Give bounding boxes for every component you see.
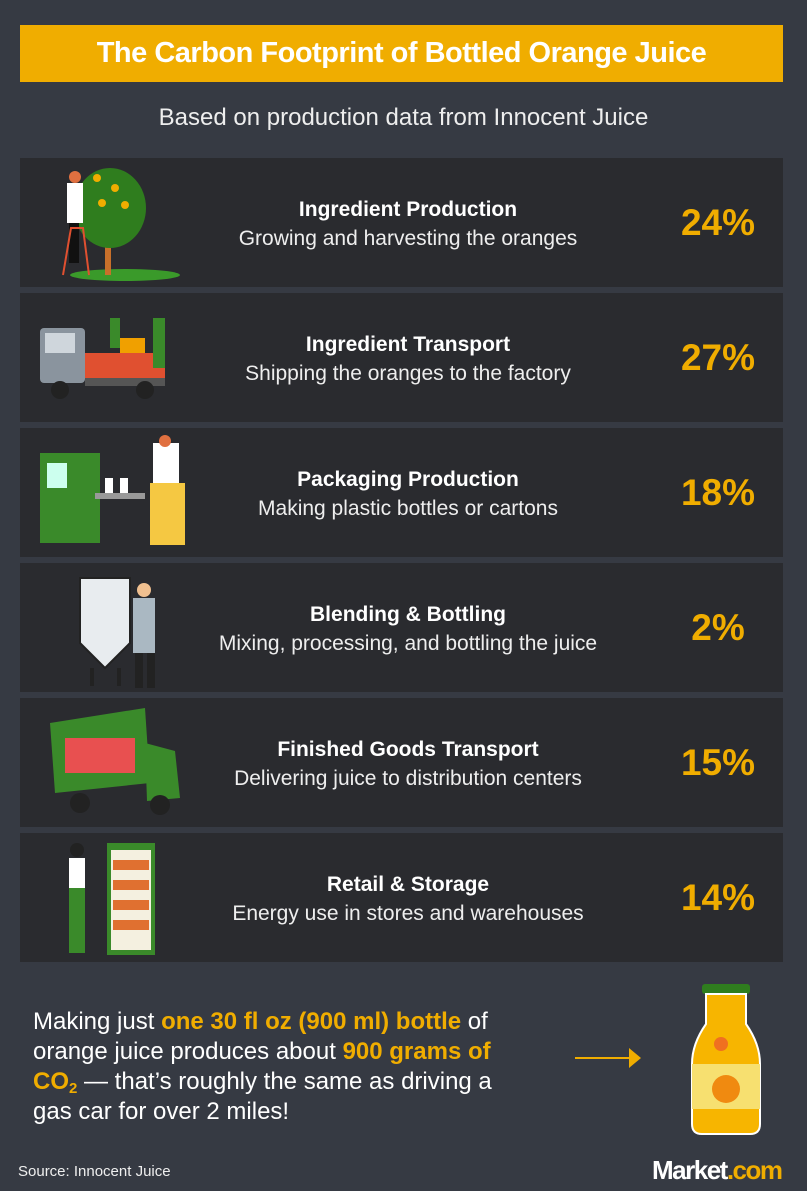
panel: retail & storage: Energy use in stores and warehouses: [232, 902, 584, 925]
panel: ingredient production: Growing and harvesting the oranges: [239, 227, 577, 250]
panel: ingredient transport: Ingredient Transport: [306, 333, 510, 356]
panel: packaging production: [20, 428, 783, 557]
panel: blending & bottling: 2%: [691, 607, 745, 648]
panel: blending & bottling: Blending & Bottling: [310, 603, 506, 626]
panel: blending & bottling: Mixing, processing, and bottling the juice: [219, 632, 597, 655]
source: Source: Innocent Juice: [18, 1163, 171, 1180]
callout text: [33, 1008, 492, 1125]
logo: Market.com: [652, 1155, 782, 1185]
panel: retail & storage: 14%: [681, 877, 755, 918]
panel: finished goods transport: 15%: [681, 742, 755, 783]
panel: retail & storage: [20, 833, 783, 962]
panel: packaging production: 18%: [681, 472, 755, 513]
icon: packaging machine: [40, 435, 185, 545]
panel: blending & bottling: [20, 563, 783, 692]
panel: ingredient transport: Shipping the oranges to the factory: [245, 362, 571, 385]
title: [20, 25, 783, 82]
icon: juice bottle: [691, 984, 761, 1135]
callout text: Making just one 30 fl oz (900 ml) bottle of: [33, 1008, 488, 1035]
icon: orange tree: [62, 168, 180, 281]
panel: ingredient production: Ingredient Production: [299, 198, 517, 221]
icon: shopper and shelf: [69, 843, 155, 955]
panel: ingredient production: 24%: [681, 202, 755, 243]
callout text: gas car for over 2 miles!: [33, 1098, 289, 1125]
title: The Carbon Footprint of Bottled Orange Juice: [97, 37, 706, 69]
callout text: orange juice produces about 900 grams of: [33, 1038, 491, 1065]
panel: finished goods transport: Finished Goods Transport: [277, 738, 539, 761]
panel: ingredient production: [20, 158, 783, 287]
icon: truck: [40, 318, 165, 399]
panel: packaging production: Packaging Production: [297, 468, 519, 491]
panel: ingredient transport: 27%: [681, 337, 755, 378]
callout text: CO2 — that’s roughly the same as driving a: [33, 1068, 492, 1097]
icon: juice truck: [50, 708, 180, 815]
panel: packaging production: Making plastic bottles or cartons: [258, 497, 558, 520]
panel: retail & storage: Retail & Storage: [327, 873, 489, 896]
icon: tank and worker: [79, 577, 155, 688]
arrow: [575, 1048, 641, 1068]
panel: finished goods transport: Delivering juice to distribution centers: [234, 767, 582, 790]
panel: finished goods transport: [20, 698, 783, 827]
subtitle: Based on production data from Innocent Juice: [159, 104, 648, 131]
panel: ingredient transport: [20, 293, 783, 422]
